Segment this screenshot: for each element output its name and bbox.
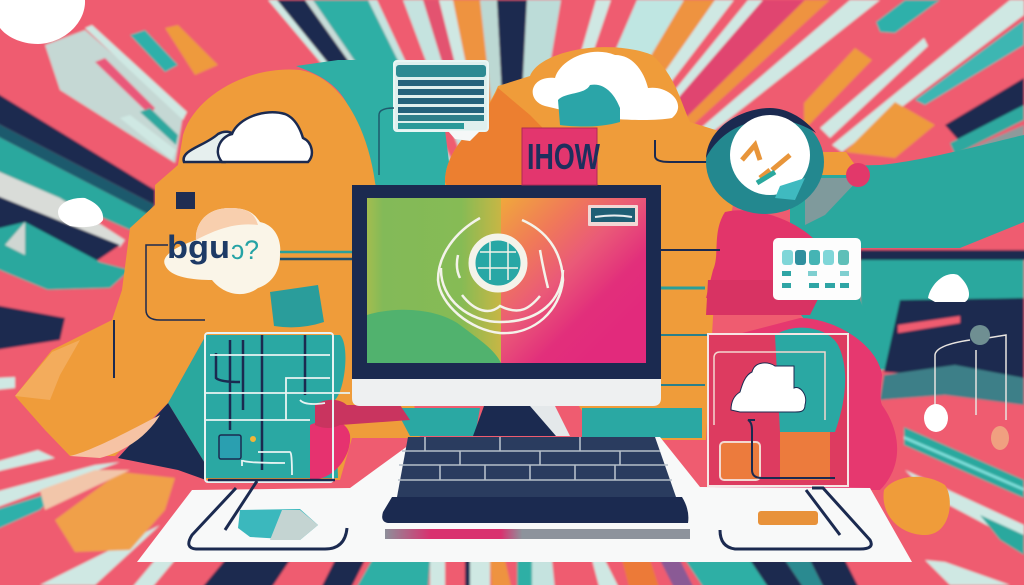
cloud in board <box>731 363 806 412</box>
desk pad: right <box>720 488 871 549</box>
teal backing <box>205 335 345 478</box>
monitor <box>352 185 661 436</box>
light circuit lines <box>205 355 350 475</box>
keyboard <box>382 437 690 539</box>
speech cloud with text <box>164 208 280 294</box>
peach highlight lower left <box>70 415 160 458</box>
icon: white cloud left <box>184 112 312 162</box>
monitor chin <box>352 378 661 406</box>
orange shading left <box>15 340 80 400</box>
pink strip below monitor left <box>335 405 410 425</box>
teal blob: right <box>790 135 1024 395</box>
orange blob: top centre <box>445 47 740 440</box>
cloud: small left <box>58 198 103 227</box>
teal wedge and navy wedge left of circuit panel <box>118 335 206 480</box>
teal pill <box>238 509 318 540</box>
panel: data list card <box>394 61 488 141</box>
key rows <box>398 437 672 480</box>
teal icon in cloud <box>558 85 620 127</box>
cloud: top left corner <box>0 0 85 44</box>
grey-teal wedge by circle <box>805 178 860 225</box>
cloud: top centre <box>533 52 678 120</box>
red dot <box>846 163 870 187</box>
icon: small navy square <box>176 192 195 209</box>
navy bar right <box>860 250 1024 260</box>
pink blob: upper right <box>706 210 820 298</box>
desk pad: left <box>189 481 347 549</box>
pink stack base <box>706 280 820 315</box>
bottom strip <box>130 560 175 585</box>
dark circuit lines <box>216 335 305 470</box>
stand <box>473 406 556 436</box>
panel: small data card <box>773 238 861 300</box>
left-upper bands <box>45 30 183 163</box>
left-lower bands <box>0 305 65 350</box>
heading box: HOW <box>522 128 600 185</box>
connector lines to monitor left <box>114 245 352 378</box>
circuit lines <box>714 352 825 425</box>
darker orange centre <box>445 88 600 186</box>
orange pill <box>758 511 818 525</box>
badge arrow marks <box>742 145 790 178</box>
small cloud: right <box>928 274 969 302</box>
peach shading on cloud <box>196 208 258 240</box>
icon: circular badge <box>706 108 824 214</box>
card frame <box>394 61 488 131</box>
cloud: faint right <box>945 165 1024 211</box>
connector lines to monitor right <box>655 140 720 385</box>
teal strip below monitor left <box>395 408 480 436</box>
teal block above left panel <box>270 285 324 327</box>
top rays <box>268 0 512 290</box>
orange orb: right <box>883 477 950 535</box>
speech cloud with text: ɔ? <box>231 235 259 265</box>
mini window on screen <box>588 205 638 226</box>
keyboard base <box>385 529 690 539</box>
panel: right cloud board <box>708 328 848 486</box>
panel: left circuit board <box>205 333 352 482</box>
orange blob: left <box>15 69 420 480</box>
monitor screen <box>367 198 502 363</box>
text: bguo?: bgu <box>167 229 230 265</box>
card bars <box>782 250 793 265</box>
desk <box>137 437 912 562</box>
space bar row <box>382 497 688 523</box>
board fills <box>708 335 848 485</box>
orange tab right of circle <box>805 152 862 175</box>
connector line from card <box>379 108 394 175</box>
right-lower bands <box>860 260 1024 370</box>
top-right bands <box>876 0 940 33</box>
teal shape behind data card <box>296 60 452 186</box>
diagram with notes: right edge <box>924 325 1009 450</box>
monitor bezel <box>352 185 661 379</box>
globe icon on screen <box>438 218 563 333</box>
teal connector block right of stand <box>582 408 702 438</box>
pink blob: right <box>715 318 897 490</box>
chip <box>219 435 241 459</box>
text: HOW: IHOW <box>527 136 600 177</box>
